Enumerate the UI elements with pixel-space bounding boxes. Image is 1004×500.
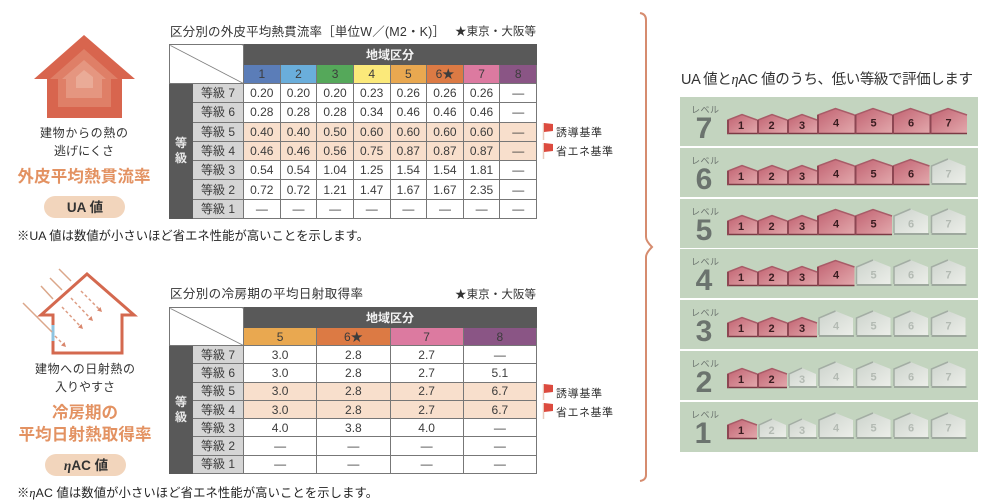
text: star note eta AC: ★東京・大阪等 <box>455 287 536 301</box>
panel: level 5: 5 <box>870 218 877 230</box>
panel: level 4: 4 <box>696 264 713 297</box>
table: UA values by region: 7 <box>478 67 485 81</box>
table: UA values by region: 0.26 <box>433 86 457 100</box>
panel: level 3: 5 <box>870 320 877 332</box>
panel: level 7: 5 <box>870 118 877 130</box>
table: UA values by region: 0.28 <box>323 105 347 119</box>
legend: UA flags: 省エネ基準 <box>556 144 613 158</box>
panel: level 7: 4 <box>833 118 840 130</box>
table: UA values by region: 0.56 <box>323 144 347 158</box>
table: eta AC values by region: 等 <box>175 395 187 409</box>
table: eta AC values by region: 3.0 <box>272 348 288 362</box>
table: UA values by region: — <box>512 125 524 139</box>
panel: level 2: 6 <box>908 372 914 384</box>
table: UA values by region: 0.46 <box>250 144 273 158</box>
table: UA values by region: 3 <box>332 67 338 81</box>
table: UA values by region: 0.46 <box>470 105 493 119</box>
table: UA values by region: 0.54 <box>287 163 310 177</box>
table: UA values by region: 0.87 <box>470 144 493 158</box>
table: UA values by region: — <box>512 183 524 197</box>
table: UA values by region: 0.72 <box>287 183 310 197</box>
table: eta AC values by region: 2.7 <box>418 366 435 380</box>
panel: level 7: 2 <box>768 120 775 132</box>
panel: eta AC value description <box>18 269 152 476</box>
table: UA values by region: 0.46 <box>287 144 310 158</box>
table: UA values by region: 6★ <box>436 67 454 81</box>
panel: level 1: 7 <box>945 422 952 434</box>
panel: level 4 <box>680 249 978 298</box>
panel: level 6: 2 <box>768 171 775 183</box>
table: UA values by region: 級 <box>175 151 187 165</box>
table: eta AC values by region: 7 <box>423 330 430 344</box>
table: eta AC values by region: 4.0 <box>272 421 288 435</box>
table: UA values by region: 0.26 <box>397 86 420 100</box>
badge: UA value: UA 値 <box>67 200 104 215</box>
table: eta AC values by region: — <box>494 457 506 471</box>
table: UA values by region: 0.34 <box>360 105 383 119</box>
table: eta AC values by region: 等級 6 <box>201 366 235 380</box>
table: UA values by region: — <box>329 202 341 216</box>
title: UA table: 区分別の外皮平均熱貫流率［単位W／(M2・K)］ <box>170 25 445 39</box>
table: eta AC values by region: — <box>421 439 433 453</box>
table: eta AC values by region: 2.8 <box>345 403 362 417</box>
heading: outer skin heat transfer: 外皮平均熱貫流率 <box>18 166 150 186</box>
brace connector <box>640 13 652 481</box>
table: UA values by region: 0.87 <box>397 144 420 158</box>
panel: level 2: 4 <box>833 372 840 384</box>
table: eta AC values by region: — <box>494 421 506 435</box>
text: heat escape caption line 2: 逃げにくさ <box>54 144 114 158</box>
panel: level 4: 2 <box>768 272 775 284</box>
table: UA values by region: 1.47 <box>360 183 383 197</box>
table: UA values by region: 地域区分 <box>366 48 414 62</box>
table: UA values by region: 0.60 <box>397 125 420 139</box>
panel: level 2: 3 <box>799 374 805 386</box>
panel: level 6: 1 <box>738 171 744 183</box>
panel: level 7: 1 <box>738 120 744 132</box>
panel: level 2: 1 <box>738 374 744 386</box>
panel: level 5: 4 <box>833 218 840 230</box>
table: eta AC values by region: 3.0 <box>272 366 288 380</box>
panel: level 7: 6 <box>908 118 914 130</box>
panel: level 3: 7 <box>945 320 952 332</box>
table: eta AC values by region: 等級 1 <box>201 457 235 471</box>
table: eta AC values by region: 8 <box>497 330 503 344</box>
panel: level 6: 6 <box>696 163 712 196</box>
table: UA values by region: — <box>256 202 268 216</box>
panel: level 6: 3 <box>799 171 805 183</box>
panel: level 2: 2 <box>768 374 775 386</box>
table: UA values by region: — <box>476 202 488 216</box>
table: UA values by region: 1.54 <box>397 163 420 177</box>
note: eta AC: ※ηAC 値は数値が小さいほど省エネ性能が高いことを示します。 <box>17 485 378 500</box>
table: UA values by region: 8 <box>515 67 522 81</box>
table: UA values by region <box>169 44 537 219</box>
table: UA values by region: 1.25 <box>360 163 383 177</box>
panel: level 1: 1 <box>738 425 744 437</box>
table: eta AC values by region: 等級 7 <box>201 348 235 362</box>
panel: level 2 <box>680 351 978 400</box>
table: UA values by region: 等級 3 <box>201 163 235 177</box>
table: UA values by region: — <box>292 202 304 216</box>
table: UA values by region: 0.75 <box>360 144 383 158</box>
table: UA values by region: 0.60 <box>433 125 457 139</box>
table: UA values by region: 1.81 <box>470 163 493 177</box>
table: UA values by region: 0.20 <box>250 86 273 100</box>
heading: evaluation rule: UA 値とηAC 値のうち、低い等級で評価します <box>681 70 973 88</box>
panel: level 7: 7 <box>945 118 952 130</box>
note: UA: ※UA 値は数値が小さいほど省エネ性能が高いことを示します。 <box>17 228 369 243</box>
table: eta AC values by region: — <box>494 439 506 453</box>
table: eta AC values by region: 等級 4 <box>201 403 235 417</box>
table: eta AC values by region: 6.7 <box>492 403 508 417</box>
panel: level 1: レベル <box>691 410 719 420</box>
panel: level 6: 6 <box>908 168 914 180</box>
table: UA values by region: — <box>512 144 524 158</box>
table: UA values by region: 1 <box>258 67 265 81</box>
table: eta AC values by region: 5.1 <box>492 366 508 380</box>
table: UA values by region: 0.87 <box>433 144 457 158</box>
table: UA values by region: 2 <box>295 67 302 81</box>
legend: UA flags <box>544 123 613 159</box>
table: eta AC values by region: 等級 3 <box>201 421 235 435</box>
table: UA values by region: 0.40 <box>250 125 273 139</box>
panel: level 1: 6 <box>908 422 914 434</box>
table: UA values by region: 等 <box>175 136 187 150</box>
table: eta AC values by region: 3.8 <box>345 421 362 435</box>
panel: level 3: 3 <box>696 315 712 348</box>
table: eta AC values by region: 等級 5 <box>201 384 235 398</box>
text: star note UA: ★東京・大阪等 <box>455 24 536 38</box>
panel: level 4: 3 <box>799 272 805 284</box>
table: UA values by region: 1.54 <box>433 163 457 177</box>
icon: layered heat house <box>34 35 135 118</box>
table: eta AC values by region: 5 <box>277 330 283 344</box>
panel: level 3 <box>680 300 978 349</box>
table: eta AC values by region: — <box>347 457 359 471</box>
panel: level 4: 1 <box>738 272 744 284</box>
table: UA values by region: 0.46 <box>397 105 420 119</box>
icon: sun through window house <box>23 269 134 353</box>
table: eta AC values by region: 等級 2 <box>201 439 235 453</box>
panel: level 2: レベル <box>691 359 719 369</box>
table: UA values by region: — <box>512 163 524 177</box>
table: UA values by region: 0.23 <box>360 86 383 100</box>
table: UA values by region: 等級 7 <box>201 86 235 100</box>
badge: eta AC value <box>45 454 126 476</box>
panel: level 7: 7 <box>696 112 712 145</box>
table: UA values by region: 2.35 <box>470 183 493 197</box>
panel: level 4: 7 <box>945 270 952 282</box>
table: UA values by region: 0.20 <box>323 86 347 100</box>
table: UA values by region: 0.50 <box>323 125 347 139</box>
panel: level 4: 6 <box>908 270 914 282</box>
panel: level 3: 1 <box>738 323 744 335</box>
table: UA values by region: 1.21 <box>323 183 347 197</box>
table: UA values by region: 0.20 <box>287 86 310 100</box>
table: UA values by region: 0.72 <box>250 183 273 197</box>
legend: eta AC flags: 省エネ基準 <box>556 405 613 419</box>
panel: level 7: 3 <box>799 120 805 132</box>
legend: UA flags: 誘導基準 <box>556 125 602 139</box>
table: UA values by region: 0.46 <box>433 105 457 119</box>
table: eta AC values by region: 2.8 <box>345 366 362 380</box>
panel: level 5: 3 <box>799 221 805 233</box>
title: eta AC table: 区分別の冷房期の平均日射取得率 <box>170 286 363 301</box>
table: UA values by region: 1.67 <box>433 183 457 197</box>
table: UA values by region: 0.40 <box>287 125 310 139</box>
panel: level 5: 5 <box>696 214 712 247</box>
panel: level 2: 7 <box>945 372 952 384</box>
panel: level 4: レベル <box>691 257 719 267</box>
text: heat escape caption: 建物からの熱の <box>40 126 128 140</box>
panel: UA value description <box>18 35 150 218</box>
table: eta AC values by region: — <box>274 457 286 471</box>
panel: level 2: 5 <box>870 372 877 384</box>
table: UA values by region: — <box>512 105 524 119</box>
table: UA values by region: — <box>512 202 524 216</box>
table: eta AC values by region: — <box>347 439 359 453</box>
table: UA values by region: 0.26 <box>470 86 493 100</box>
table: UA values by region: — <box>512 86 524 100</box>
table: UA values by region: 1.04 <box>323 163 347 177</box>
table: UA values by region: — <box>402 202 414 216</box>
table: UA values by region: 等級 2 <box>201 183 235 197</box>
panel: level 5 <box>680 199 978 248</box>
table: UA values by region: 0.28 <box>250 105 273 119</box>
panel: level 1 <box>680 402 978 452</box>
badge: eta AC value: ηAC 値 <box>64 458 109 473</box>
panel: level 6: 4 <box>833 168 840 180</box>
panel: level 6: 5 <box>870 168 877 180</box>
legend: eta AC flags: 誘導基準 <box>556 386 602 400</box>
table: eta AC values by region: 2.7 <box>418 403 435 417</box>
table: eta AC values by region: 2.8 <box>345 348 362 362</box>
table: UA values by region: 等級 4 <box>201 144 235 158</box>
table: eta AC values by region: 地域区分 <box>366 310 414 324</box>
table: UA values by region: 1.67 <box>397 183 420 197</box>
legend: eta AC flags <box>544 384 613 419</box>
table: eta AC values by region: — <box>494 348 506 362</box>
panel: level 7: レベル <box>691 105 719 115</box>
table: eta AC values by region <box>169 307 537 474</box>
table: UA values by region: — <box>439 202 451 216</box>
panel: level 1: 2 <box>768 425 775 437</box>
table: eta AC values by region: 2.7 <box>418 348 435 362</box>
panel: level 5: 6 <box>908 218 914 230</box>
table: UA values by region: 0.60 <box>470 125 493 139</box>
badge: UA value <box>44 196 125 218</box>
panel: level 5: 2 <box>768 221 775 233</box>
panel: level 3: 4 <box>833 320 840 332</box>
table: UA values by region: 0.60 <box>360 125 383 139</box>
panel: level 3: 2 <box>768 323 775 335</box>
table: eta AC values by region: 6.7 <box>492 384 508 398</box>
table: eta AC values by region: 2.7 <box>418 384 435 398</box>
panel: level 1: 1 <box>695 417 711 450</box>
table: UA values by region: 等級 6 <box>201 105 235 119</box>
table: UA values by region: 等級 5 <box>201 125 235 139</box>
table: UA values by region: 等級 1 <box>201 202 235 216</box>
text: solar caption: 建物への日射熱の <box>35 361 135 376</box>
table: eta AC values by region: — <box>274 439 286 453</box>
table: eta AC values by region: 3.0 <box>272 384 288 398</box>
panel: level 7 <box>680 97 978 146</box>
panel: level 5: 7 <box>945 218 952 230</box>
panel: level 1: 3 <box>799 425 805 437</box>
heading: solar gain rate: 平均日射熱取得率 <box>18 425 152 444</box>
table: UA values by region: 0.28 <box>287 105 310 119</box>
panel: level 5: 1 <box>738 221 744 233</box>
panel: level 1: 5 <box>870 422 877 434</box>
table: UA values by region: 0.54 <box>250 163 273 177</box>
panel: level 6 <box>680 148 978 197</box>
panel: level 3: レベル <box>691 308 719 318</box>
table: UA values by region: — <box>366 202 378 216</box>
panel: level 1: 4 <box>833 422 840 434</box>
table: eta AC values by region: 4.0 <box>418 421 435 435</box>
panel: level 3: 3 <box>799 323 805 335</box>
panel: level 5: レベル <box>691 207 719 217</box>
heading: cooling period: 冷房期の <box>52 403 118 422</box>
panel: level 6: 7 <box>945 168 952 180</box>
panel: level 6: レベル <box>691 156 719 166</box>
table: UA values by region: 5 <box>405 67 412 81</box>
table: eta AC values by region: 級 <box>175 410 187 424</box>
table: eta AC values by region: 6★ <box>344 330 363 344</box>
panel: level 4: 4 <box>833 270 840 282</box>
table: eta AC values by region: — <box>421 457 433 471</box>
table: eta AC values by region: 2.8 <box>345 384 362 398</box>
table: eta AC values by region: 3.0 <box>272 403 288 417</box>
panel: level 2: 2 <box>696 366 712 399</box>
table: UA values by region: 4 <box>368 67 375 81</box>
text: solar caption line 2: 入りやすさ <box>55 380 115 394</box>
panel: level 4: 5 <box>870 270 877 282</box>
panel: level 3: 6 <box>908 320 914 332</box>
